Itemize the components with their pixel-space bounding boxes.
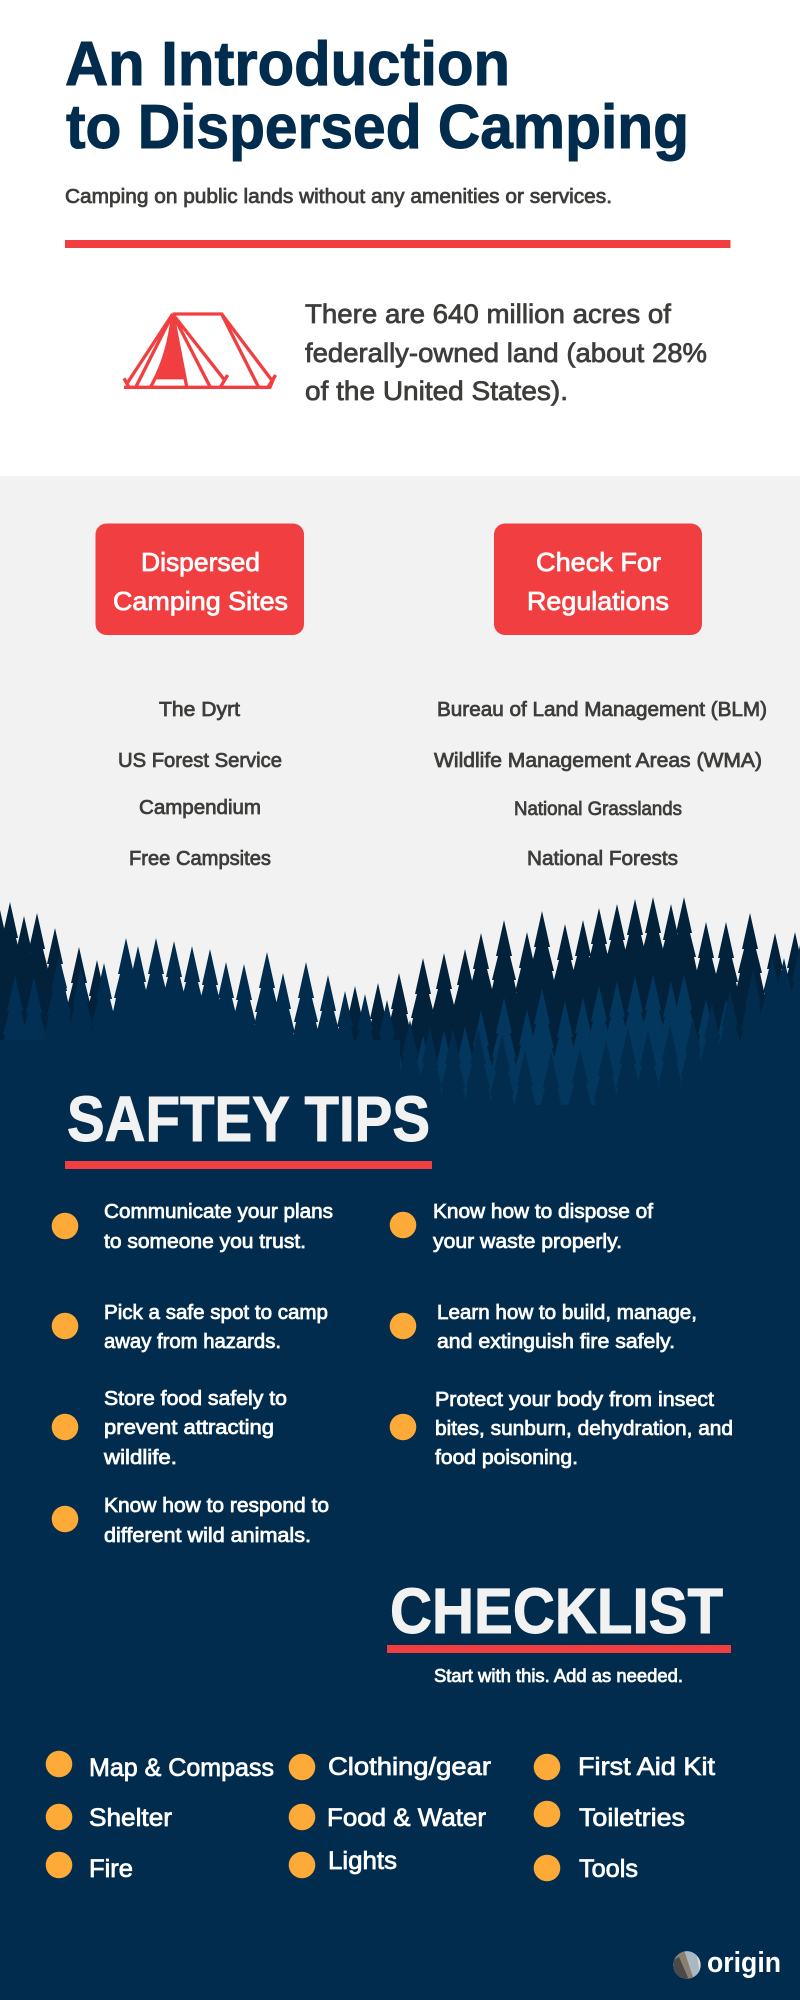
tip: dispose of waste: Know how to dispose of <box>433 1201 653 1223</box>
item: fire: Fire <box>89 1855 133 1883</box>
item: first aid kit: First Aid Kit <box>578 1753 715 1781</box>
panel: header on white background <box>0 0 800 476</box>
tip: protect your body: bites, sunburn, dehydration, and <box>435 1418 733 1440</box>
item: fire <box>46 1852 133 1883</box>
tip: fire safety: Learn how to build, manage, <box>437 1302 697 1324</box>
red underline: safety tips <box>65 1161 432 1169</box>
button: check for regulations: Check For <box>536 547 661 577</box>
button: check for regulations <box>494 524 702 635</box>
title: An Introduction <box>65 30 510 99</box>
tip: safe spot <box>52 1302 328 1353</box>
tip: protect your body: food poisoning. <box>435 1447 578 1469</box>
tip: store food: Store food safely to <box>104 1388 287 1410</box>
tip: wild animals <box>52 1495 329 1547</box>
text block: federal land fact <box>305 299 707 406</box>
text block: federal land fact: federally-owned land (about 28% <box>305 338 707 368</box>
title <box>65 30 689 162</box>
list: camping site resources: Free Campsites <box>129 848 271 870</box>
list: regulating agencies: Bureau of Land Management (BLM) <box>437 699 767 721</box>
illustration: forest treeline <box>0 897 800 1375</box>
item: map and compass: Map & Compass <box>89 1754 274 1782</box>
item: shelter: Shelter <box>89 1804 172 1832</box>
tip: safe spot: away from hazards. <box>104 1331 281 1353</box>
button: dispersed camping sites: Dispersed <box>141 547 260 577</box>
tip: protect your body: Protect your body from insect <box>435 1389 714 1411</box>
list: camping site resources: Campendium <box>139 797 261 819</box>
tip: protect your body <box>390 1389 733 1469</box>
button: dispersed camping sites <box>96 524 304 635</box>
panel: sites and regulations on gray background <box>0 476 800 1116</box>
tip: store food: prevent attracting <box>104 1417 274 1439</box>
text block: federal land fact: of the United States). <box>305 376 568 406</box>
tip: dispose of waste: your waste properly. <box>433 1231 622 1253</box>
list: camping site resources: US Forest Service <box>118 750 282 772</box>
button: check for regulations: Regulations <box>527 586 669 616</box>
tip: dispose of waste <box>390 1201 653 1253</box>
icon: tent <box>124 314 276 387</box>
item: tools: Tools <box>579 1855 638 1883</box>
item: clothing and gear: Clothing/gear <box>328 1753 491 1781</box>
item: first aid kit <box>534 1753 715 1781</box>
tip: fire safety: and extinguish fire safely. <box>437 1331 675 1353</box>
tip: wild animals: Know how to respond to <box>104 1495 329 1517</box>
logo: origin <box>673 1951 780 1979</box>
text block: federal land fact: There are 640 million acres of <box>305 299 672 329</box>
tip: wild animals: different wild animals. <box>104 1525 311 1547</box>
item: toiletries <box>534 1801 685 1832</box>
list: regulating agencies: National Grasslands <box>514 799 682 820</box>
tip: communicate plans: to someone you trust. <box>104 1231 306 1253</box>
list: regulating agencies: Wildlife Management Areas (WMA) <box>434 750 762 772</box>
item: toiletries: Toiletries <box>579 1804 685 1832</box>
checklist items <box>46 1751 715 1883</box>
tip: fire safety <box>390 1302 697 1353</box>
tips list <box>52 1201 733 1547</box>
red divider <box>65 240 730 248</box>
heading: checklist: CHECKLIST <box>390 1575 723 1647</box>
title: to Dispersed Camping <box>66 93 689 162</box>
item: tools <box>534 1855 638 1883</box>
tip: store food: wildlife. <box>103 1447 177 1469</box>
checklist subtitle: Start with this. Add as needed. <box>434 1666 683 1686</box>
item: lights <box>289 1847 397 1878</box>
panel: navy lower section <box>0 1083 800 2000</box>
tip: communicate plans: Communicate your plans <box>104 1201 333 1223</box>
list: camping site resources <box>118 699 282 870</box>
list: regulating agencies <box>434 699 767 870</box>
item: shelter <box>46 1804 172 1832</box>
tip: safe spot: Pick a safe spot to camp <box>104 1302 328 1324</box>
red underline: checklist <box>387 1645 731 1653</box>
logo: origin: origin <box>707 1947 781 1979</box>
tip: communicate plans <box>52 1201 333 1253</box>
item: food and water: Food & Water <box>327 1804 486 1832</box>
list: camping site resources: The Dyrt <box>159 699 240 721</box>
subtitle: Camping on public lands without any amenities or services. <box>65 186 612 208</box>
heading: safety tips: SAFTEY TIPS <box>67 1083 430 1155</box>
list: regulating agencies: National Forests <box>527 848 678 870</box>
tip: store food <box>52 1388 287 1469</box>
item: lights: Lights <box>328 1847 397 1875</box>
button: dispersed camping sites: Camping Sites <box>113 586 288 616</box>
